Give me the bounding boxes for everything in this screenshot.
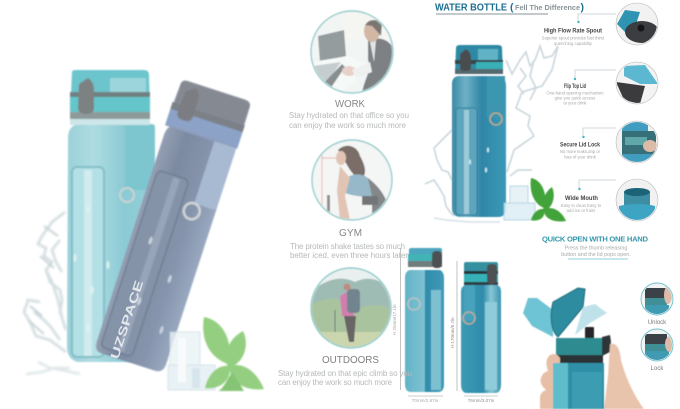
feature: wide mouth: Wide Mouth: [565, 195, 598, 202]
brand text on navy bottle: UZSPACE: [108, 279, 146, 361]
ice cubes: [504, 186, 535, 220]
lock label: Lock: [651, 366, 664, 372]
work description: can enjoy the work so much more: [289, 121, 407, 130]
outdoors heading: OUTDOORS: [322, 354, 379, 366]
feature: flip top lid: One-hand opening mechanism: [546, 90, 604, 96]
unlock icon: [641, 283, 673, 315]
feature: flip top lid: give you quick access: [555, 96, 595, 100]
title: ): [580, 2, 584, 14]
outdoors photo: [310, 268, 392, 350]
gym description: The protein shake tastes so much: [290, 242, 405, 251]
work section: [289, 10, 409, 130]
panel: size comparison: [392, 248, 501, 403]
open lid: [523, 298, 553, 337]
mint leaves: [203, 317, 264, 391]
short bottle width label: [464, 396, 498, 403]
gym description: [290, 242, 408, 260]
spout circle: [616, 3, 659, 46]
outdoors section: [278, 268, 412, 387]
gym description: better iced, even three hours later: [290, 251, 408, 260]
feature: flip top lid: Flip Top Lid: [564, 83, 586, 90]
wide mouth circle: [616, 179, 658, 222]
tall bottle: [405, 248, 444, 392]
feature: wide mouth: [561, 179, 658, 222]
center splash: [425, 46, 558, 222]
lock circle: [616, 121, 658, 164]
quick open description: Press the thumb releasing: [565, 246, 627, 252]
hand fingers: [540, 354, 560, 409]
short bottle: [461, 262, 501, 393]
feature: secure lid lock: loss of your drink: [564, 154, 597, 160]
tall bottle width label: [408, 396, 443, 403]
spout: [585, 327, 594, 339]
feature: secure lid lock: [560, 121, 658, 164]
outdoors description: can enjoy the work so much more: [278, 378, 393, 387]
feature: high flow rate spout: Superior spout provides fast thirst: [542, 36, 605, 40]
feature: secure lid lock: Secure Lid Lock: [560, 142, 600, 148]
panel: quick open with one hand: [523, 234, 675, 409]
work photo: [311, 10, 396, 94]
bottle body: [553, 363, 604, 409]
feature: high flow rate spout: quenching capability: [554, 41, 593, 46]
tall bottle width label: 70mm/2.67in: [412, 398, 439, 403]
title: WATER BOTTLE: [435, 2, 507, 14]
work description: Stay hydrated on that office so you: [289, 111, 409, 120]
feature: flip top lid: [546, 62, 658, 106]
gym heading: GYM: [339, 227, 362, 239]
feature: secure lid lock: No more leaks,drip or: [560, 149, 601, 154]
center bottle: [452, 45, 506, 217]
quick open heading: QUICK OPEN WITH ONE HAND: [542, 234, 649, 244]
short bottle width label: 76mm/3.07in: [468, 398, 495, 403]
quick open description: button and the lid pops open.: [561, 252, 631, 258]
work description: [289, 111, 409, 130]
short bottle dimension: H:170mm/6.7in: [450, 317, 455, 348]
title: Fell The Difference: [515, 3, 580, 12]
lid circle: [616, 62, 658, 104]
feature: wide mouth: add ice or fruits: [567, 208, 595, 213]
panel: faded hero bottles: [24, 70, 264, 391]
feature: high flow rate spout: High Flow Rate Spout: [544, 28, 603, 34]
gym section: [290, 140, 408, 260]
tall bottle dimension: H 25mm/17.1in: [392, 304, 397, 335]
feature: wide mouth: Easy to clean Easy to: [561, 203, 602, 208]
ice cubes: [168, 332, 215, 390]
collar: [556, 338, 603, 355]
panel: usage scenarios: [278, 10, 412, 387]
title: [435, 2, 584, 14]
gym photo: [312, 140, 392, 222]
water splash left: [24, 212, 80, 374]
mint leaves: [531, 178, 566, 221]
panel: water bottle features: [425, 2, 659, 222]
navy bottle: [92, 79, 252, 374]
short bottle dimension: [450, 261, 457, 391]
work heading: WORK: [335, 98, 365, 110]
quick open description: [561, 246, 631, 258]
outdoors description: [278, 369, 412, 387]
feature: high flow rate spout: [542, 3, 659, 46]
teal bottle: [67, 70, 155, 362]
hand thumb and palm: [604, 344, 644, 409]
hand holding open bottle: [523, 288, 644, 409]
unlock label: Unlock: [648, 320, 667, 326]
outdoors description: Stay hydrated on that epic climb so you: [278, 369, 412, 378]
title: (: [510, 2, 514, 14]
feature: flip top lid: to your drink: [563, 100, 587, 106]
lock icon: [641, 329, 675, 361]
